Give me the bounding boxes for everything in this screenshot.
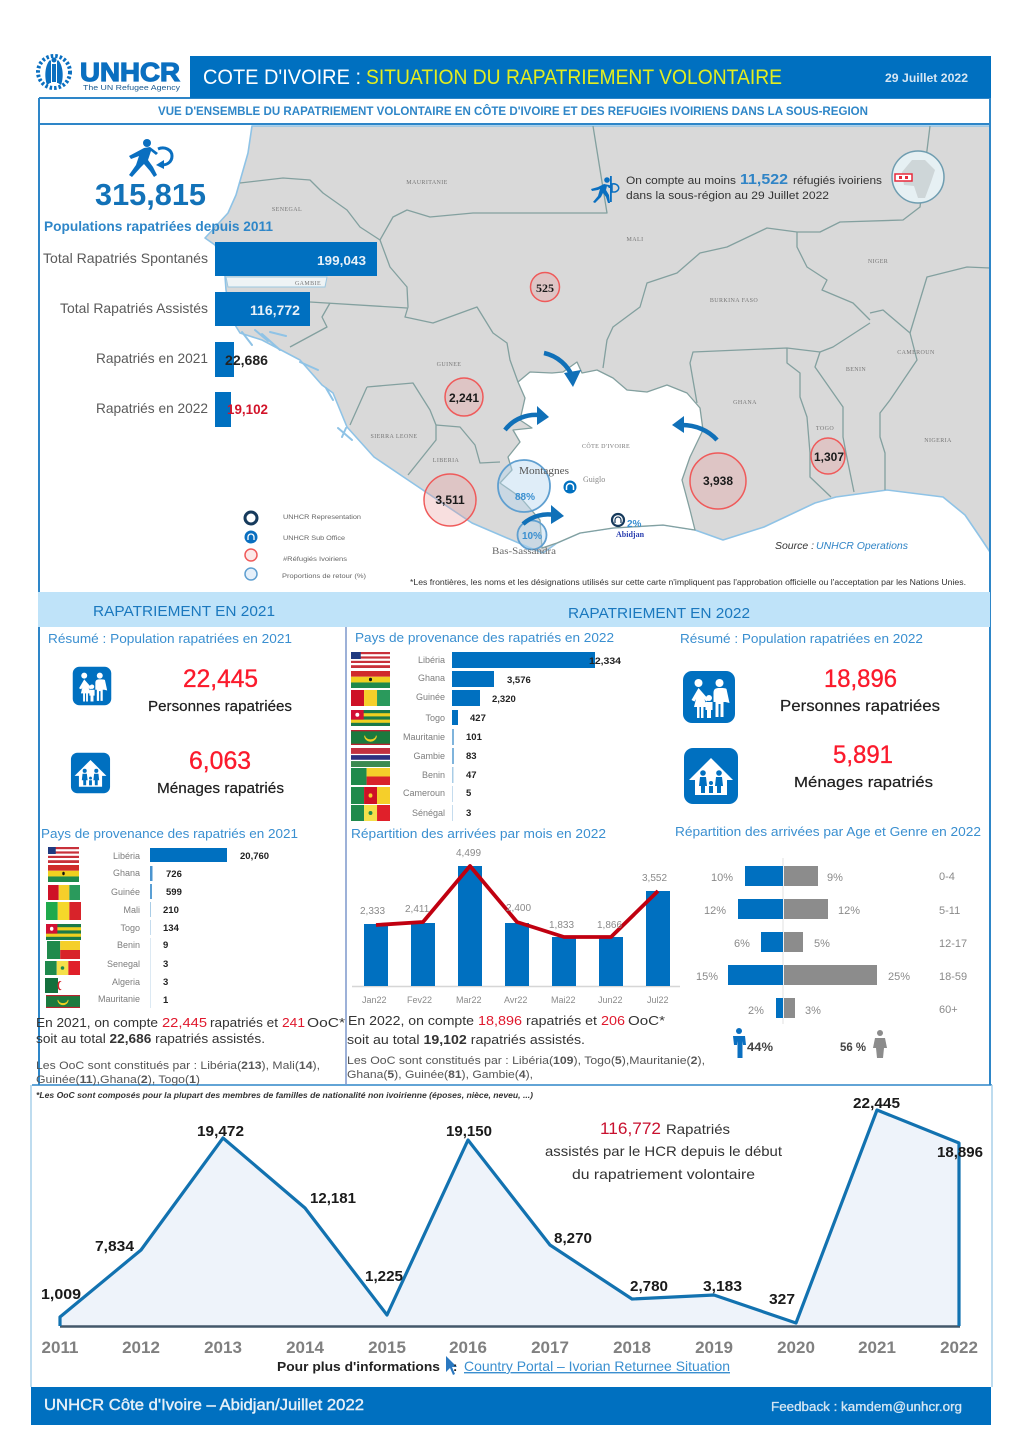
panel: age and gender: 9%	[827, 872, 843, 884]
band: section headings: RAPATRIEMENT EN 2021	[93, 603, 275, 620]
text: 2022 summary: En 2022, on compte	[348, 1013, 474, 1028]
map: country labels: MALI	[627, 237, 643, 243]
map: country labels: BURKINA FASO	[710, 298, 758, 304]
map: place labels: 88%	[515, 492, 535, 503]
panel: countries of origin 2021: 20,760	[240, 851, 269, 862]
chart: returnee totals: Rapatriés en 2022	[96, 400, 208, 416]
panel: summary 2022: Résumé : Population rapatriées en 2022	[680, 631, 923, 646]
panel: arrivals by month 2022: Jan22	[362, 995, 387, 1005]
text: 2022 summary: 206	[601, 1013, 625, 1028]
chart: assisted returnees per year: 2012	[122, 1338, 160, 1357]
disclaimer: *Les frontières, les noms et les désignations utilisés sur cette carte n'impliquent pas l'approbation officielle ou l'acceptation par les Nations Unies.	[410, 578, 966, 587]
map: country labels: TOGO	[816, 426, 834, 432]
panel: countries of origin 2021: 3	[163, 959, 168, 970]
trend line	[376, 866, 658, 937]
callout: assisted total: assistés par le HCR depuis le début	[545, 1143, 782, 1159]
chart: returnee totals: Total Rapatriés Spontanés	[43, 250, 208, 266]
logo: UNHCR: The UN Refugee Agency	[83, 83, 180, 92]
panel: age and gender: 6%	[734, 938, 750, 950]
text: 2022 summary: Les OoC sont constitués par : Libéria( 109), Togo( 5),Mauritanie( 2),	[347, 1055, 705, 1067]
icon: male	[733, 1028, 746, 1058]
panel: countries of origin 2021	[41, 826, 298, 1008]
map: country labels: CÔTE D'IVOIRE	[582, 442, 630, 450]
panel: age and gender: 3%	[805, 1005, 821, 1017]
panel: countries of origin 2022: 47	[466, 770, 477, 781]
panel: countries of origin 2021: 9	[163, 940, 168, 951]
panel: age and gender: 5%	[814, 938, 830, 950]
map: land mass	[205, 126, 990, 553]
callout: refugees in sub-region: réfugiés ivoiriens	[793, 175, 883, 187]
map legend	[244, 512, 366, 580]
chart: assisted returnees per year: 2013	[204, 1338, 242, 1357]
panel: arrivals by month 2022: 3,552	[642, 873, 667, 884]
panel: arrivals by month 2022	[351, 826, 680, 1005]
panel: age and gender	[675, 824, 981, 1058]
map legend: Proportions de retour (%)	[282, 574, 366, 580]
more information link	[277, 1356, 730, 1375]
chart: returnee totals: Rapatriés en 2021	[96, 350, 208, 366]
panel: arrivals by month 2022: 2,333	[360, 906, 385, 917]
panel: summary 2022: 18,896	[824, 665, 897, 693]
panel: countries of origin 2022: 83	[466, 751, 477, 762]
map: place labels: 10%	[522, 531, 542, 542]
more information link: :	[453, 1359, 457, 1374]
more information link: Pour plus d'informations	[277, 1359, 440, 1374]
chart: assisted returnees per year: 2020	[777, 1338, 815, 1357]
map: refugee counts: 2,241	[449, 391, 479, 405]
panel: arrivals by month 2022: Mai22	[551, 995, 576, 1005]
map: country labels: CAMEROUN	[897, 350, 935, 356]
icon: family	[73, 667, 111, 705]
map: country labels: SIERRA LEONE	[371, 434, 417, 440]
panel: countries of origin 2021: Benin	[117, 940, 140, 950]
footnote: *Les OoC sont composés pour la plupart des membres de familles de nationalité non ivoirienne (époses, nièce, neveu, ...)	[36, 1091, 533, 1100]
chart: returnee totals: 199,043	[317, 253, 366, 268]
panel: age and gender: 2%	[748, 1005, 764, 1017]
chart: assisted returnees per year: 18,896	[937, 1144, 983, 1161]
panel: countries of origin 2021: Ghana	[113, 868, 140, 878]
panel: countries of origin 2021: Libéria	[113, 851, 140, 861]
icon: household 2022	[684, 748, 738, 804]
text: 2021 summary: Guinée( 11),Ghana( 2), Togo( 1)	[36, 1074, 200, 1086]
icon: cursor	[446, 1356, 457, 1375]
panel: countries of origin 2022: Ghana	[418, 673, 445, 683]
panel: countries of origin 2021: 726	[166, 869, 182, 880]
banner: title: 29 Juillet 2022	[885, 73, 968, 85]
chart: assisted returnees per year: 2017	[531, 1338, 569, 1357]
map: country labels: GAMBIE	[295, 281, 321, 287]
chart: assisted returnees per year: 2016	[449, 1338, 487, 1357]
bars 2022	[452, 652, 595, 821]
panel: countries of origin 2021: Guinée	[111, 887, 140, 897]
bars 2021	[150, 848, 227, 1008]
panel: summary 2022: Ménages rapatriés	[794, 774, 933, 791]
pyramid: male	[728, 866, 783, 1018]
panel: arrivals by month 2022: Mar22	[456, 995, 482, 1005]
panel: summary 2021: Résumé : Population rapatriées en 2021	[48, 631, 292, 646]
panel: countries of origin 2021: Mauritanie	[98, 994, 140, 1004]
text: 2022 summary: 18,896	[478, 1013, 522, 1028]
panel: summary 2021: Ménages rapatriés	[157, 780, 284, 797]
chart: returnee totals: 19,102	[227, 401, 268, 417]
footer: Feedback : kamdem@unhcr.org	[771, 1399, 962, 1414]
column divider	[345, 627, 347, 1085]
map: Gambia strip	[226, 277, 327, 287]
text: 2021 summary: En 2021, on compte	[36, 1015, 158, 1030]
panel: countries of origin 2022: 3,576	[507, 675, 531, 686]
icon: globe locator	[892, 151, 944, 203]
arrows: return flows	[505, 353, 717, 524]
text: 2021 summary: 241	[282, 1015, 305, 1030]
panel: countries of origin 2022: Mauritanie	[403, 732, 445, 742]
icon: UNHCR representation Abidjan	[612, 514, 624, 526]
more information link: Country Portal – Ivorian Returnee Situation	[464, 1358, 730, 1374]
panel: age and gender: 12-17	[939, 938, 967, 950]
panel: arrivals by month 2022: 2,400	[506, 903, 531, 914]
chart: assisted returnees per year: 12,181	[310, 1190, 356, 1207]
heading: populations repatriated: Populations rapatriées depuis 2011	[44, 218, 273, 234]
flags 2021	[45, 847, 81, 1008]
chart: assisted returnees per year: 2015	[368, 1338, 406, 1357]
band: section headings: RAPATRIEMENT EN 2022	[568, 605, 750, 622]
chart: assisted returnees per year: 2019	[695, 1338, 733, 1357]
icon: family 2022	[683, 671, 735, 723]
footer	[31, 1387, 991, 1425]
callout: refugees in sub-region: On compte au moins	[626, 175, 737, 187]
panel: arrivals by month 2022: 2,411	[405, 904, 430, 915]
panel: summary 2021	[48, 631, 292, 797]
text: 2021 summary	[36, 1015, 345, 1086]
map: return proportion circles	[498, 460, 550, 550]
panel: age and gender: 5-11	[939, 905, 960, 917]
text: 2021 summary: OoC*	[307, 1015, 345, 1030]
text: 2021 summary: Les OoC sont constitués par : Libéria( 213), Mali( 14),	[36, 1060, 320, 1072]
map: country labels: GUINEE	[437, 362, 461, 368]
panel: arrivals by month 2022: Répartition des arrivées par mois en 2022	[351, 826, 606, 841]
chart: assisted returnees per year: 19,472	[197, 1123, 244, 1140]
panel: arrivals by month 2022: Fev22	[407, 995, 432, 1005]
panel: countries of origin 2022: Libéria	[418, 655, 445, 665]
source note: UNHCR Operations	[816, 541, 908, 552]
chart: assisted returnees per year: 7,834	[95, 1238, 135, 1255]
panel: countries of origin 2021: 599	[166, 887, 182, 898]
map: country labels: MAURITANIE	[406, 180, 448, 186]
map: refugee circles	[424, 272, 845, 526]
panel: countries of origin 2021: 3	[163, 977, 168, 988]
text: 2022 summary: rapatriés et	[526, 1013, 597, 1028]
panel: age and gender: 10%	[711, 872, 733, 884]
chart: assisted returnees per year: 2014	[286, 1338, 324, 1357]
panel: countries of origin 2021: Mali	[123, 905, 140, 915]
subtitle: VUE D'ENSEMBLE DU RAPATRIEMENT VOLONTAIRE EN CÔTE D'IVOIRE ET DES REFUGIES IVOIRIENS DANS LA SOUS-REGION	[158, 103, 868, 118]
map: coastal islands and estuaries	[242, 330, 352, 440]
panel: countries of origin 2022: 12,334	[589, 656, 622, 667]
panel: age and gender: 25%	[888, 971, 910, 983]
map: Côte d'Ivoire	[500, 362, 703, 548]
panel: arrivals by month 2022: 1,833	[549, 920, 574, 931]
text: 2022 summary: Ghana( 5), Guinée( 81), Gambie( 4),	[347, 1069, 533, 1081]
panel: map	[39, 124, 990, 591]
source note: Source :	[775, 541, 814, 552]
map: place labels: Montagnes	[519, 466, 569, 477]
map: place labels: Abidjan	[616, 530, 645, 539]
text: 2022 summary	[347, 1013, 705, 1081]
panel: age and gender: 0-4	[939, 871, 955, 883]
map: refugee counts: 3,511	[435, 493, 465, 507]
callout: assisted total: du rapatriement volontaire	[572, 1166, 755, 1182]
panel: arrivals by month 2022: Avr22	[504, 995, 527, 1005]
map: country labels: BENIN	[846, 367, 866, 373]
panel: summary 2022: 5,891	[833, 741, 893, 769]
panel: age and gender: 56 %	[840, 1040, 866, 1054]
callout: refugees in sub-region: 11,522	[740, 171, 788, 188]
panel: arrivals by month 2022: Jul22	[647, 995, 669, 1005]
panel: summary 2021: 6,063	[189, 747, 251, 775]
panel: countries of origin 2022: 5	[466, 788, 472, 799]
baseline	[60, 1325, 960, 1328]
text: 2021 summary: rapatriés et	[210, 1015, 278, 1030]
panel: countries of origin 2021: 134	[163, 923, 180, 934]
panel: countries of origin 2022: Togo	[425, 713, 445, 723]
chart: assisted returnees per year: 22,445	[853, 1095, 900, 1112]
map: refugee counts: 1,307	[814, 450, 844, 464]
panel: arrivals by month 2022: Jun22	[598, 995, 623, 1005]
callout: assisted total: Rapatriés	[666, 1121, 730, 1137]
map legend: #Réfugiés Ivoiriens	[283, 557, 347, 563]
chart: assisted returnees per year	[41, 1095, 983, 1357]
panel: age and gender: 15%	[696, 971, 718, 983]
map: country borders	[240, 126, 990, 497]
area	[60, 1110, 959, 1326]
panel: arrivals by month 2022: 4,499	[456, 848, 481, 859]
icon: female	[873, 1030, 887, 1058]
panel: age and gender: Répartition des arrivées par Age et Genre en 2022	[675, 824, 981, 839]
panel: arrivals by month 2022: 1,866	[597, 920, 622, 931]
panel: countries of origin 2021: 210	[163, 905, 179, 916]
panel: countries of origin 2022	[351, 630, 622, 821]
callout: refugees in sub-region	[591, 171, 883, 203]
chart: returnee totals	[43, 242, 377, 427]
chart: assisted returnees per year: 2021	[858, 1338, 896, 1357]
chart: assisted returnees per year: 3,183	[703, 1278, 742, 1295]
chart: assisted returnees per year: 2,780	[630, 1278, 668, 1295]
line	[60, 1110, 959, 1326]
chart: assisted returnees per year: 2018	[613, 1338, 651, 1357]
panel: countries of origin 2022: Gambie	[413, 751, 445, 761]
banner: title: SITUATION DU RAPATRIEMENT VOLONTAIRE	[366, 66, 782, 89]
logo: UNHCR: UNHCR	[80, 57, 180, 87]
panel: age and gender: 12%	[838, 905, 860, 917]
callout: assisted total	[545, 1119, 782, 1182]
icon: refugees	[591, 176, 619, 203]
panel: countries of origin 2021: Togo	[120, 923, 140, 933]
map: country labels: GHANA	[733, 400, 757, 406]
panel: summary 2022: Personnes rapatriées	[780, 698, 940, 715]
map: country labels	[272, 180, 952, 464]
panel: summary 2022	[680, 631, 940, 804]
chart: assisted returnees per year: 2022	[940, 1338, 978, 1357]
text: 2022 summary: OoC*	[628, 1013, 665, 1028]
map: country labels: NIGER	[868, 259, 888, 265]
map: country labels: SENEGAL	[272, 207, 302, 213]
source note	[775, 541, 908, 552]
text: 2021 summary: 22,445	[162, 1015, 207, 1030]
chart: returnee totals: 22,686	[225, 352, 268, 368]
panel: countries of origin 2022: 101	[466, 732, 483, 743]
bars by month	[364, 866, 670, 986]
banner: title: COTE D'IVOIRE :	[203, 66, 361, 89]
panel: countries of origin 2021: Senegal	[107, 959, 140, 969]
chart: returnee totals: 116,772	[250, 302, 300, 318]
callout: assisted total: 116,772	[600, 1119, 661, 1138]
map: refugee counts: 3,938	[703, 474, 733, 488]
map legend: UNHCR Representation	[283, 515, 361, 521]
chart: assisted returnees per year: 8,270	[554, 1230, 592, 1247]
chart: assisted returnees per year: 2011	[42, 1338, 78, 1357]
panel: countries of origin 2022: Pays de provenance des rapatriés en 2022	[355, 630, 614, 645]
map: refugee counts	[435, 281, 844, 507]
chart: assisted returnees per year: 19,150	[446, 1123, 492, 1140]
panel: countries of origin 2021: Pays de provenance des rapatriés en 2021	[41, 826, 298, 841]
map: refugee counts: 525	[536, 281, 554, 295]
panel: countries of origin 2022: Benin	[422, 770, 445, 780]
chart: returnee totals: Total Rapatriés Assistés	[60, 300, 208, 316]
icon: returning person	[129, 139, 172, 177]
panel: countries of origin 2022: Sénégal	[412, 808, 445, 818]
callout: refugees in sub-region: dans la sous-région au 29 Juillet 2022	[626, 190, 829, 202]
chart: assisted returnees per year: 327	[769, 1291, 795, 1308]
map: country labels: LIBERIA	[433, 458, 459, 464]
band: section headings	[38, 592, 990, 627]
text: 2021 summary: soit au total 22,686 rapatriés assistés.	[36, 1031, 265, 1046]
map: country labels: NIGERIA	[924, 438, 952, 444]
panel: countries of origin 2022: Cameroun	[403, 788, 445, 798]
banner: title	[190, 56, 991, 98]
panel: countries of origin 2021: 1	[163, 995, 169, 1006]
flags 2022	[351, 652, 390, 821]
chart: assisted returnees per year: 1,225	[365, 1268, 403, 1285]
logo: UNHCR	[38, 56, 180, 92]
panel: countries of origin 2022: 427	[470, 713, 486, 724]
panel: age and gender: 60+	[939, 1004, 958, 1016]
panel: countries of origin 2022: Guinée	[416, 692, 445, 702]
map: place labels: Guiglo	[583, 475, 605, 484]
panel: summary 2021: 22,445	[183, 665, 258, 693]
map: place labels: Bas-Sassandra	[492, 546, 556, 556]
pyramid: female	[784, 866, 877, 1018]
panel: summary 2021: Personnes rapatriées	[148, 698, 292, 715]
text: 2022 summary: soit au total 19,102 rapatriés assistés.	[347, 1032, 585, 1047]
panel: countries of origin 2022: 2,320	[492, 694, 516, 705]
footer: UNHCR Côte d'Ivoire – Abidjan/Juillet 2022	[44, 1397, 364, 1414]
panel: age and gender: 18-59	[939, 971, 967, 983]
total returnees: 315,815	[95, 177, 206, 212]
icon: UNHCR sub office Guiglo	[564, 480, 576, 494]
map: place labels: 2%	[627, 519, 642, 530]
panel: age and gender: 44%	[747, 1040, 773, 1054]
panel: countries of origin 2021: Algeria	[112, 977, 140, 987]
map legend: UNHCR Sub Office	[283, 536, 346, 542]
icon: household	[71, 753, 110, 793]
map: place labels	[492, 466, 645, 556]
chart: assisted returnees per year: 1,009	[41, 1286, 81, 1303]
panel: age and gender: 12%	[704, 905, 726, 917]
panel: countries of origin 2022: 3	[466, 808, 471, 819]
